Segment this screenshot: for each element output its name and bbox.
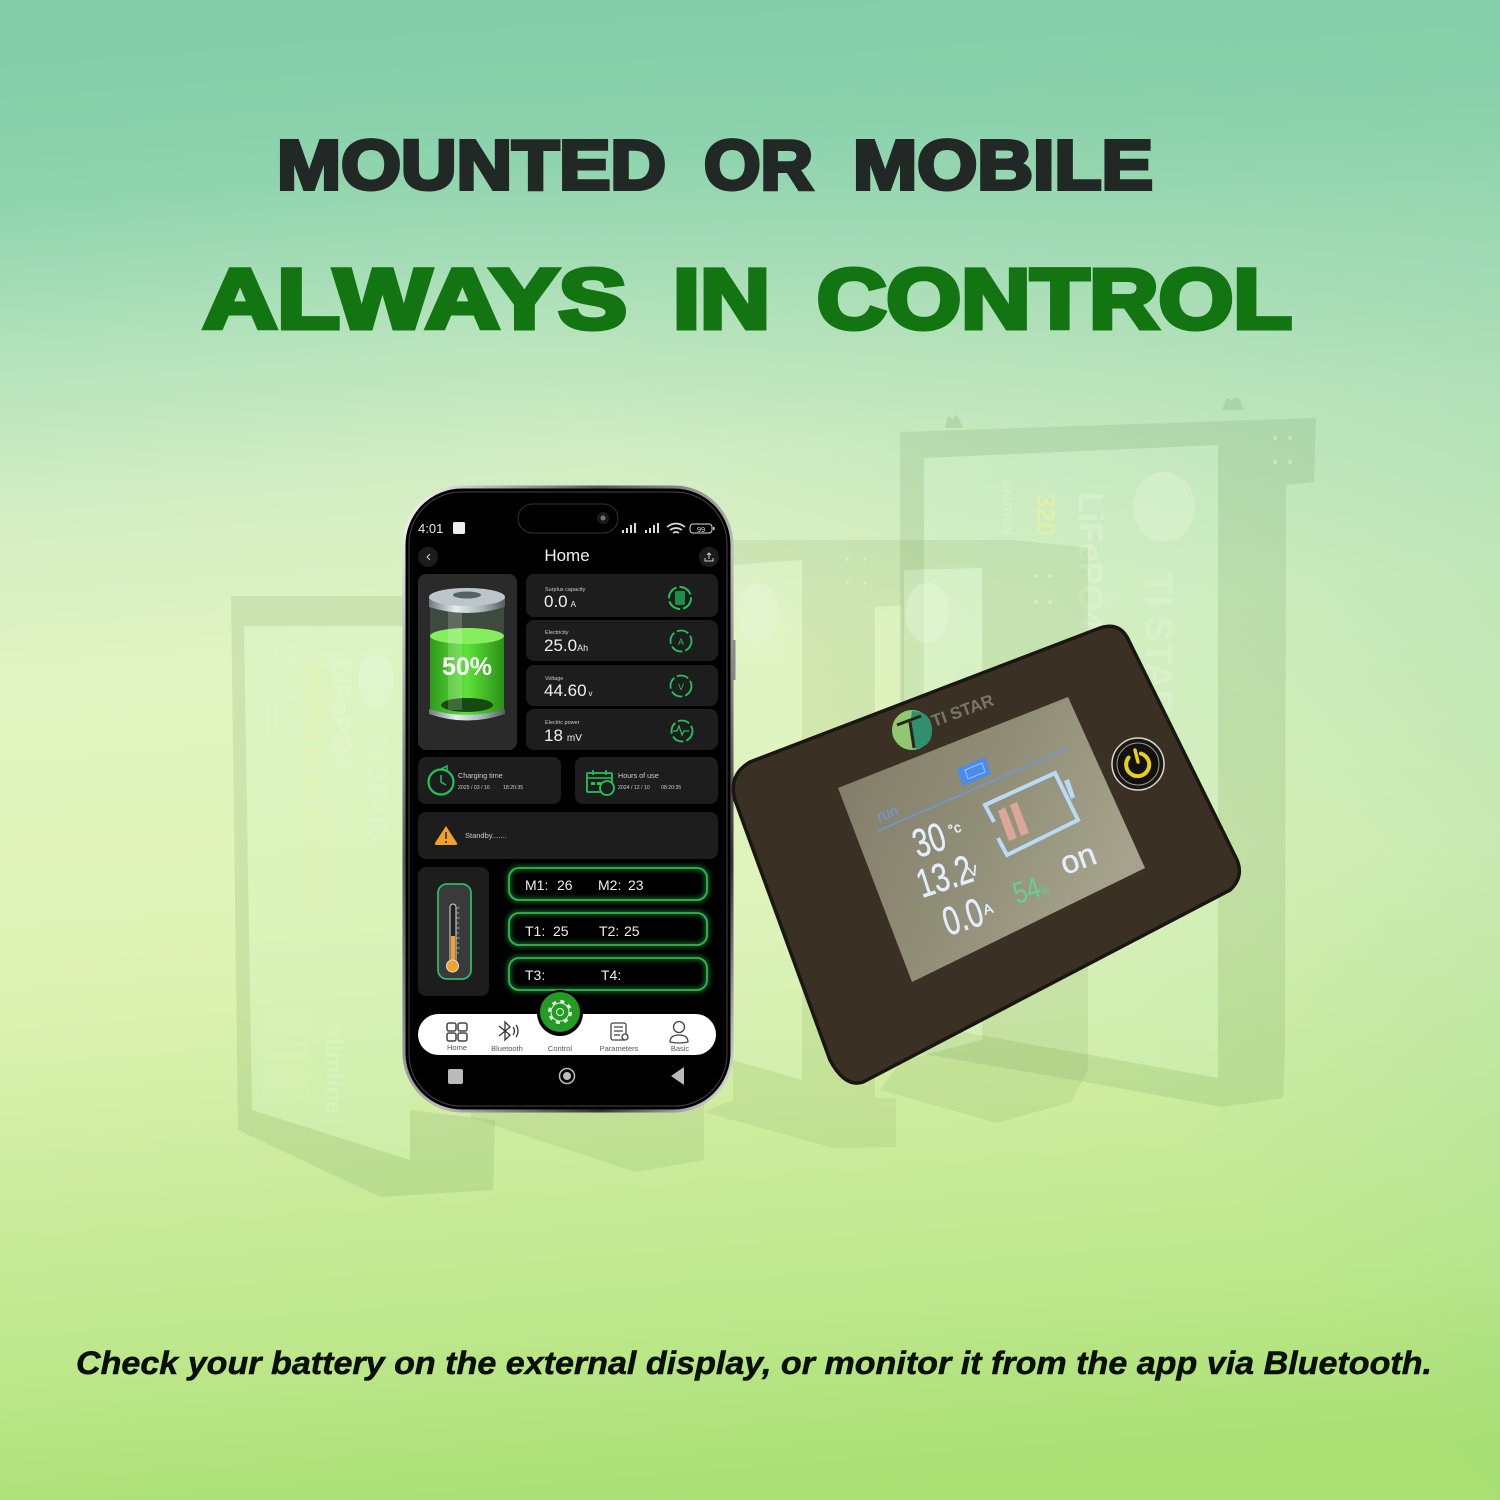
nav labels: Parameters bbox=[600, 1044, 639, 1053]
card: hours of use: Hours of use bbox=[618, 771, 659, 780]
card: charging time: 18:20:35 bbox=[503, 785, 523, 791]
card: hours of use: 2024 / 12 / 10 bbox=[618, 785, 650, 791]
readouts: °c bbox=[946, 819, 963, 838]
title: mounted or mobile: MOUNTED bbox=[277, 126, 666, 204]
status bar: 99 bbox=[697, 525, 705, 534]
nav labels: Home bbox=[447, 1043, 467, 1052]
readouts: V bbox=[966, 862, 980, 880]
card: charging time: 2025 / 03 / 16 bbox=[458, 785, 490, 791]
icon: basic user bbox=[670, 1022, 688, 1043]
status bar: 4:01 bbox=[418, 521, 443, 536]
battery: right rear: 320 bbox=[1031, 493, 1061, 536]
readouts: 13.2 bbox=[911, 847, 978, 907]
readout: M1 M2: 23 bbox=[628, 877, 644, 893]
readout: T3 T4 bbox=[509, 958, 707, 990]
LCD screen: run bbox=[875, 802, 901, 826]
metric card: voltage: Voltage bbox=[545, 676, 563, 682]
readout: T3 T4: T4: bbox=[601, 967, 621, 983]
nav labels: Bluetooth bbox=[491, 1044, 523, 1053]
metric card: electricity: 25.0Ah bbox=[544, 636, 588, 655]
icon: battery level bbox=[985, 773, 1078, 855]
phone body bbox=[404, 487, 736, 1111]
readout: T1 T2: 25 bbox=[624, 923, 640, 939]
icon: home grid bbox=[447, 1023, 467, 1041]
battery: left front bbox=[231, 596, 495, 1197]
header bbox=[418, 546, 719, 567]
icon: bluetooth box bbox=[957, 757, 991, 786]
status bar: standby bbox=[418, 812, 718, 859]
nav labels bbox=[447, 1043, 689, 1053]
readouts: 30 bbox=[907, 814, 951, 867]
metric card: voltage: 44.60v bbox=[544, 681, 593, 700]
nav labels: Basic bbox=[671, 1044, 689, 1053]
status line bbox=[878, 748, 1068, 831]
battery status panel bbox=[418, 574, 517, 750]
metric card: electricity: Electricity bbox=[545, 630, 569, 636]
metric card: electric power: Electric power bbox=[545, 720, 580, 726]
status bar: standby: Standby....... bbox=[465, 831, 507, 840]
readouts: on bbox=[1055, 836, 1101, 882]
battery: middle left: TI STAR bbox=[736, 672, 767, 779]
android buttons bbox=[448, 1067, 684, 1085]
battery: left front: LiFePO4 bbox=[326, 660, 356, 770]
metric card: electric power bbox=[526, 709, 718, 750]
title: mounted or mobile: OR bbox=[704, 126, 813, 204]
battery: right rear: TI STAR bbox=[1137, 572, 1179, 717]
battery: under phone bbox=[471, 1060, 704, 1172]
status bar bbox=[418, 504, 714, 536]
icon: glass battery 50% bbox=[429, 588, 505, 720]
card: hours of use bbox=[575, 757, 718, 804]
phone mockup bbox=[404, 487, 736, 1111]
LCD screen: 54% bbox=[1008, 867, 1053, 910]
readout: T1 T2: T2: bbox=[599, 923, 619, 939]
metric card: voltage: V bbox=[678, 682, 684, 692]
battery: left front: TI STAR bbox=[362, 733, 392, 836]
readout: M1 M2: M2: bbox=[598, 877, 621, 893]
title: always in control bbox=[203, 252, 1292, 346]
readouts: A bbox=[981, 900, 995, 918]
metric card: voltage bbox=[526, 665, 718, 706]
card: charging time bbox=[418, 757, 561, 804]
logo: TI STAR bbox=[892, 691, 996, 750]
battery: left front: CAUTION bbox=[287, 645, 301, 700]
icon: bluetooth bbox=[499, 1022, 518, 1040]
battery: middle right bbox=[880, 540, 1088, 1123]
readout: M1 M2: M1: bbox=[525, 877, 548, 893]
metric card: electricity bbox=[526, 620, 718, 661]
caption: Check your battery on the external display, or monitor it from the app via Bluetooth. bbox=[76, 1345, 1432, 1381]
readout: T1 T2: T1: bbox=[525, 923, 545, 939]
metric card: surplus capacity bbox=[526, 574, 718, 617]
icon: glass battery 50%: 50% bbox=[442, 653, 492, 681]
readouts bbox=[907, 814, 1101, 945]
nav labels: Control bbox=[548, 1044, 572, 1053]
metric card: surplus capacity: 0.0 A bbox=[544, 592, 577, 611]
battery: right rear bbox=[900, 397, 1316, 1107]
external display device bbox=[733, 626, 1239, 1083]
readout: T3 T4: T3: bbox=[525, 967, 545, 983]
battery: right rear: LiFePO4 bbox=[1071, 492, 1109, 630]
readout: T1 T2 bbox=[509, 913, 707, 945]
battery: right rear: CAUTION bbox=[1000, 480, 1014, 535]
metric card: electricity: A bbox=[678, 637, 684, 647]
bottom navigation bbox=[418, 990, 716, 1055]
LCD screen bbox=[838, 697, 1145, 982]
readout: M1 M2: 26 bbox=[557, 877, 573, 893]
icon: parameters clipboard bbox=[611, 1023, 628, 1040]
title: always in control: CONTROL bbox=[817, 252, 1292, 346]
logo: TI STAR: TI STAR bbox=[929, 691, 996, 731]
background: faded battery lineup bbox=[231, 397, 1316, 1197]
card: charging time: Charging time bbox=[458, 771, 503, 780]
card: hours of use: 08:20:35 bbox=[661, 785, 681, 791]
display body bbox=[733, 626, 1239, 1083]
battery: middle left bbox=[704, 540, 902, 1148]
readout: M1 M2 bbox=[509, 868, 707, 900]
temperature panel bbox=[418, 867, 489, 996]
title: always in control: IN bbox=[673, 252, 770, 346]
readouts: 0.0 bbox=[937, 890, 989, 945]
icon: control gear bbox=[540, 992, 580, 1032]
battery: left front: slimline bbox=[320, 1025, 347, 1114]
battery: left front: 100Ah | 12.8V | 1280WH bbox=[301, 660, 326, 906]
title: mounted or mobile: MOBILE bbox=[853, 126, 1153, 204]
power button bbox=[1112, 738, 1164, 790]
header: Home bbox=[544, 546, 590, 565]
metric card: electric power: 18 mV bbox=[544, 726, 582, 745]
title: mounted or mobile bbox=[277, 126, 1153, 204]
QR code bbox=[266, 1010, 306, 1098]
title: always in control: ALWAYS bbox=[203, 252, 627, 346]
metric card: surplus capacity: Surplus capacity bbox=[545, 587, 586, 593]
readout: T1 T2: 25 bbox=[553, 923, 569, 939]
